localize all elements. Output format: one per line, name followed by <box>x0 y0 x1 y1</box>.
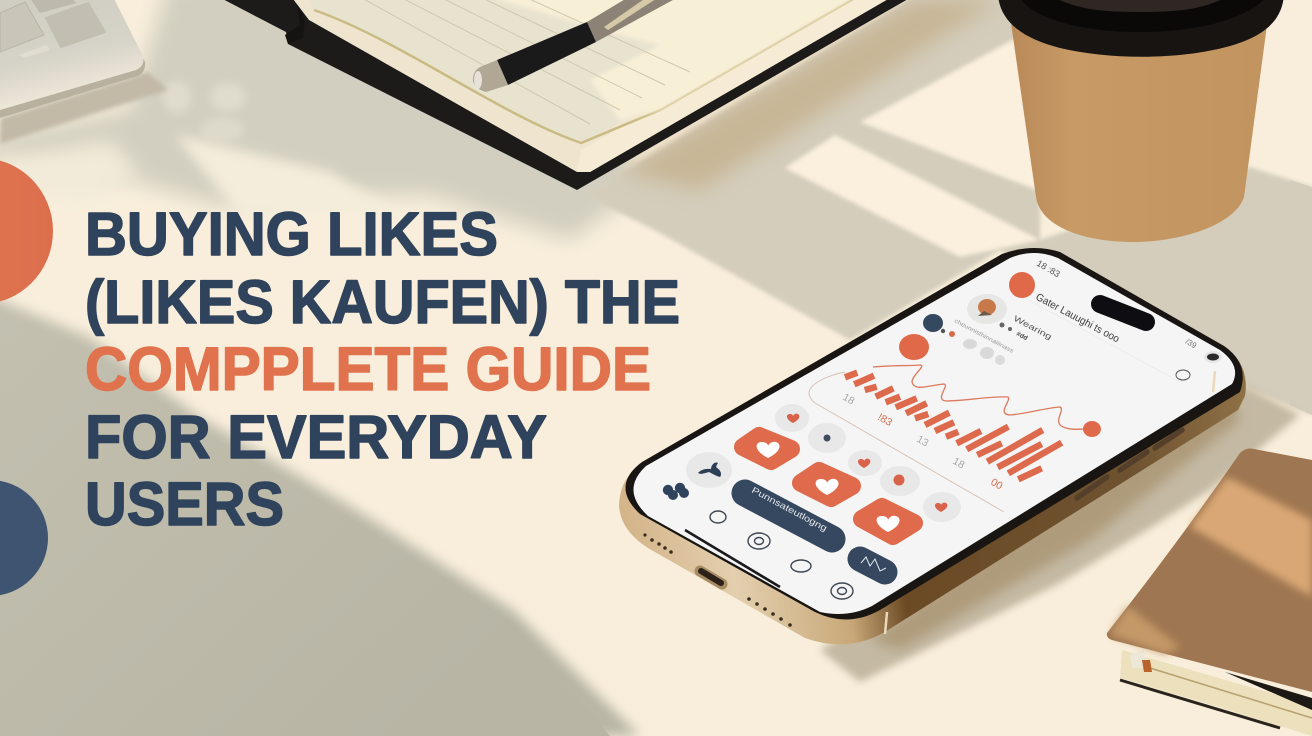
heart tile 1 <box>743 436 791 461</box>
status icons: /39 <box>1184 337 1199 351</box>
notebook open page <box>308 0 860 143</box>
dynamic island <box>1100 304 1146 322</box>
title: USERS <box>85 470 284 538</box>
keyboard body <box>0 0 145 118</box>
phone <box>619 248 1246 644</box>
phone body <box>619 248 1246 644</box>
cup body <box>1011 23 1267 242</box>
heart tile 2 <box>801 471 852 498</box>
title: FOR EVERYDAY <box>85 403 547 471</box>
title <box>85 200 680 538</box>
navigation icons <box>710 511 853 599</box>
small dots <box>941 329 1005 365</box>
notebook bottom right <box>1107 448 1312 736</box>
chart axis labels: !83 <box>876 411 894 429</box>
profile stats: #dd <box>1015 331 1029 342</box>
profile caption: cheunnisthinnaiiinass <box>953 318 1014 355</box>
title: BUYING LIKES <box>85 200 498 268</box>
charging port <box>700 571 722 584</box>
profile name: Wearing <box>1012 314 1053 341</box>
status time: 18 :83 <box>1035 258 1062 279</box>
chart axis labels: 13 <box>914 433 931 450</box>
bottom-left clover icon <box>663 483 689 500</box>
speakers <box>643 533 792 627</box>
sunlit tip on cover <box>1110 606 1180 654</box>
chart axis labels: 18 <box>840 391 857 408</box>
home indicator <box>685 530 780 587</box>
notebook page block <box>290 0 895 172</box>
secondary action pill <box>860 557 886 572</box>
frame notches <box>885 371 1215 634</box>
primary action pill <box>745 485 832 539</box>
sunlit band on cover <box>1190 477 1312 597</box>
status icons <box>1184 337 1222 363</box>
keyboard <box>0 0 168 144</box>
header divider <box>1008 289 1180 382</box>
chart end marker <box>1083 421 1101 437</box>
pages <box>1120 650 1312 736</box>
side buttons <box>1077 430 1182 498</box>
chart axis labels: 18 <box>950 455 967 472</box>
elastic band <box>285 5 305 44</box>
chart axis labels <box>840 391 1005 493</box>
small icon circles <box>686 404 961 522</box>
line chart curve <box>873 365 1092 429</box>
sunlit page <box>484 0 860 120</box>
profile stats <box>1000 322 1029 342</box>
coffee cup <box>998 0 1284 242</box>
chart frame <box>809 372 1004 512</box>
bar chart <box>845 373 1062 479</box>
primary action pill: Punnsateutlogng <box>750 485 829 533</box>
keyboard keys <box>0 0 105 58</box>
title: COMPPLETE GUIDE <box>85 335 651 403</box>
small icon glyphs <box>698 414 947 512</box>
decorative navy circle <box>0 480 48 596</box>
keyboard shadow <box>0 72 168 144</box>
chart axis labels: 00 <box>988 476 1005 493</box>
heart tile 3 <box>862 507 914 536</box>
screen <box>633 253 1235 614</box>
pen <box>473 0 682 92</box>
title: (LIKES KAUFEN) THE <box>85 268 680 336</box>
header badge <box>1009 272 1035 298</box>
notebook cover <box>215 0 915 190</box>
cup lid <box>998 0 1284 57</box>
phone bezel <box>625 248 1243 620</box>
coral badge <box>899 334 929 360</box>
avatar <box>967 294 1007 324</box>
header title: Gater Lauughi ts ooo <box>1034 291 1121 345</box>
decorative coral circle <box>0 158 53 304</box>
brown cover <box>1107 448 1312 692</box>
notebook <box>215 0 915 190</box>
chat icon <box>1176 370 1190 380</box>
navy status dot <box>923 314 943 332</box>
